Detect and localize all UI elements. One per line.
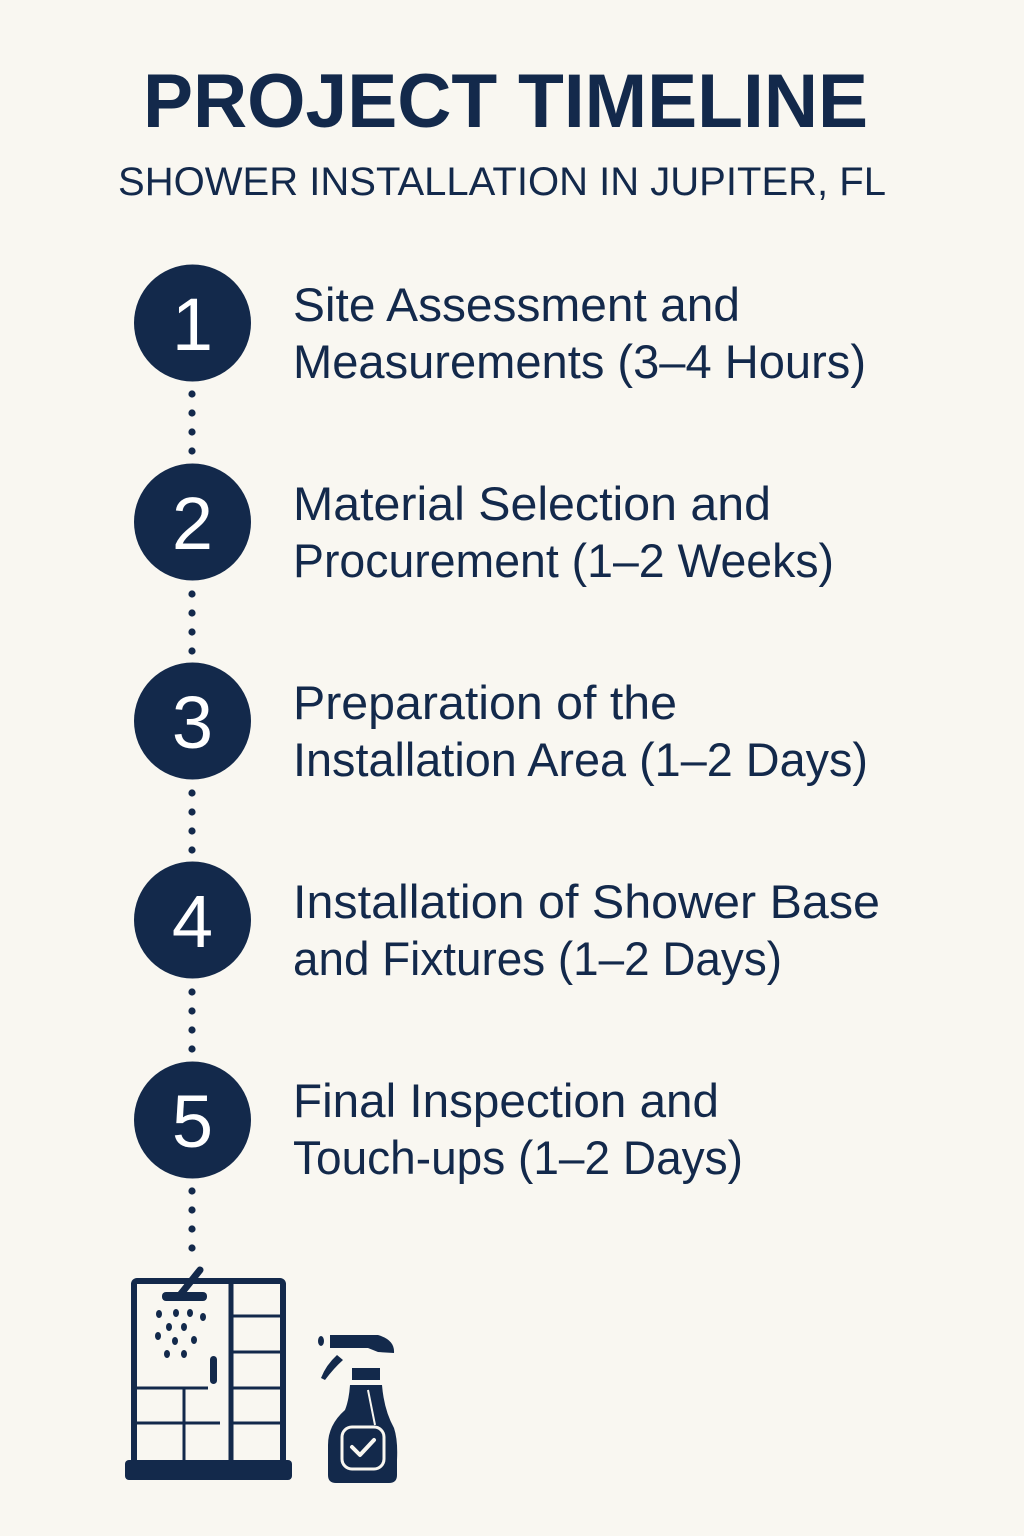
step 5	[134, 1062, 743, 1184]
step 3: Preparation of the	[293, 676, 677, 729]
step 2: Procurement (1–2 Weeks)	[293, 534, 834, 587]
icon: shower enclosure	[125, 1270, 292, 1480]
step 3: Installation Area (1–2 Days)	[293, 733, 868, 786]
step 4: Installation of Shower Base	[293, 875, 880, 928]
icon: spray bottle with check	[318, 1335, 397, 1483]
step 4: 4	[172, 880, 213, 963]
step 2	[134, 464, 834, 587]
step 4	[134, 862, 880, 985]
step 1: Measurements (3–4 Hours)	[293, 335, 866, 388]
step 5: Final Inspection and	[293, 1074, 719, 1127]
step 5: 5	[172, 1080, 213, 1163]
timeline connector dots	[188, 390, 196, 1252]
title: PROJECT TIMELINE	[143, 59, 868, 144]
step 5: Touch-ups (1–2 Days)	[293, 1131, 743, 1184]
step 1	[134, 264, 866, 388]
step 2: 2	[172, 482, 213, 565]
step 4: and Fixtures (1–2 Days)	[293, 932, 782, 985]
step 2: Material Selection and	[293, 477, 771, 530]
step 1: Site Assessment and	[293, 278, 740, 331]
subtitle: SHOWER INSTALLATION IN JUPITER, FL	[118, 160, 886, 204]
step 3: 3	[172, 681, 213, 764]
step 1: 1	[172, 283, 213, 366]
step 3	[134, 662, 868, 786]
